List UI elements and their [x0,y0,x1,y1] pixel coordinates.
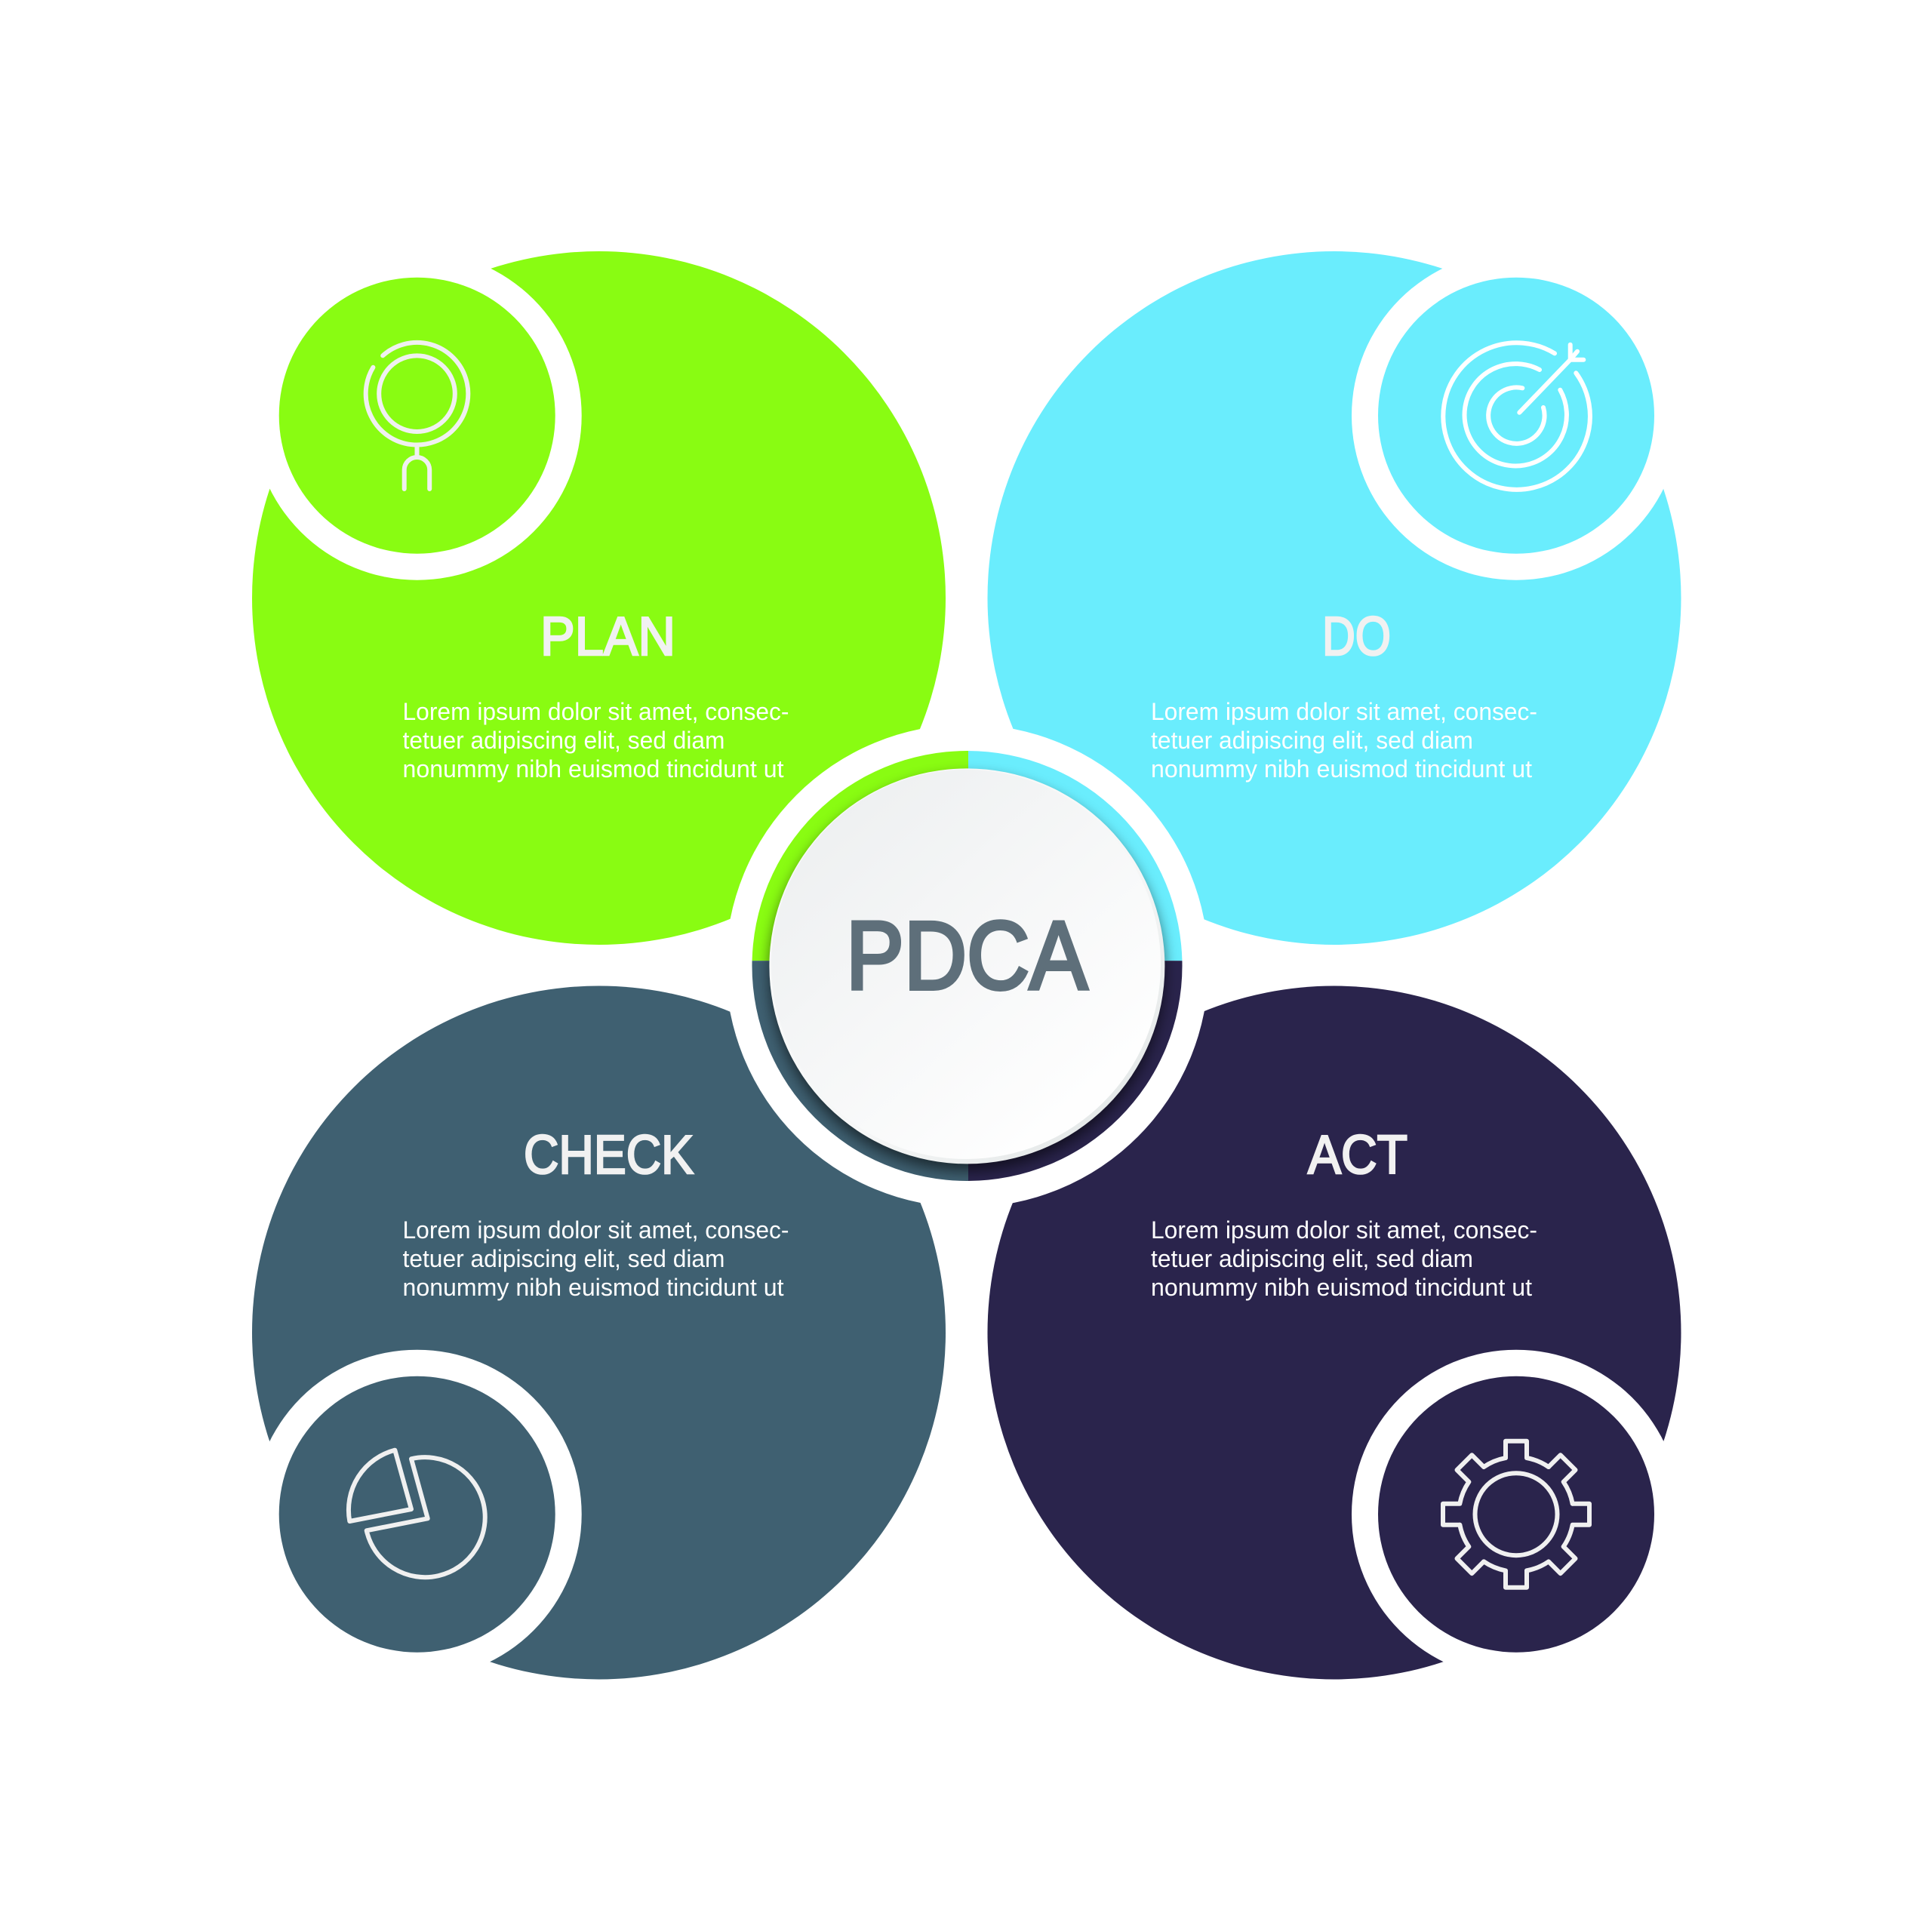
icon: magnifier globe [366,343,468,489]
icon: pie chart [349,1450,485,1577]
plan body text [403,698,789,783]
hub disc [771,770,1161,1159]
panel: do [987,251,1681,945]
act large circle [987,986,1681,1680]
do body text: tetuer adipiscing elit, sed diam [1151,727,1473,754]
act body text: tetuer adipiscing elit, sed diam [1151,1245,1473,1272]
four-colour ring [747,747,1187,1187]
check large circle [252,986,946,1680]
check body text: Lorem ipsum dolor sit amet, consec- [403,1216,789,1244]
act body text [1151,1216,1537,1301]
plan body text: tetuer adipiscing elit, sed diam [403,727,724,754]
icon: target with arrow [1443,343,1590,490]
check heading: CHECK [524,1125,694,1185]
do large circle [987,251,1681,945]
hub disc rim [769,768,1164,1164]
plan body text: nonummy nibh euismod tincidunt ut [403,755,783,783]
do body text: Lorem ipsum dolor sit amet, consec- [1151,698,1537,725]
plan heading: PLAN [540,607,675,667]
act heading: ACT [1308,1125,1407,1185]
icon: gear [1441,1440,1591,1589]
check body text [403,1216,789,1301]
plan large circle [252,251,946,945]
panel: act [987,986,1681,1680]
panel: check [252,986,946,1680]
plan body text: Lorem ipsum dolor sit amet, consec- [403,698,789,725]
check body text: tetuer adipiscing elit, sed diam [403,1245,724,1272]
hub white cutout [726,724,1209,1207]
check icon badge [279,1376,555,1653]
check icon badge cutout [253,1350,582,1679]
check body text: nonummy nibh euismod tincidunt ut [403,1274,783,1301]
act icon badge [1378,1376,1654,1653]
do icon badge cutout [1352,251,1681,580]
act body text: nonummy nibh euismod tincidunt ut [1151,1274,1532,1301]
plan icon badge [279,278,555,554]
do body text [1151,698,1537,783]
panel: plan [252,251,946,945]
hub label: PDCA [846,903,1088,1010]
center hub: pdca [726,724,1209,1207]
act icon badge cutout [1352,1350,1681,1679]
act body text: Lorem ipsum dolor sit amet, consec- [1151,1216,1537,1244]
do body text: nonummy nibh euismod tincidunt ut [1151,755,1532,783]
plan icon badge cutout [253,251,582,580]
do heading: DO [1322,607,1391,667]
do icon badge [1378,278,1654,554]
